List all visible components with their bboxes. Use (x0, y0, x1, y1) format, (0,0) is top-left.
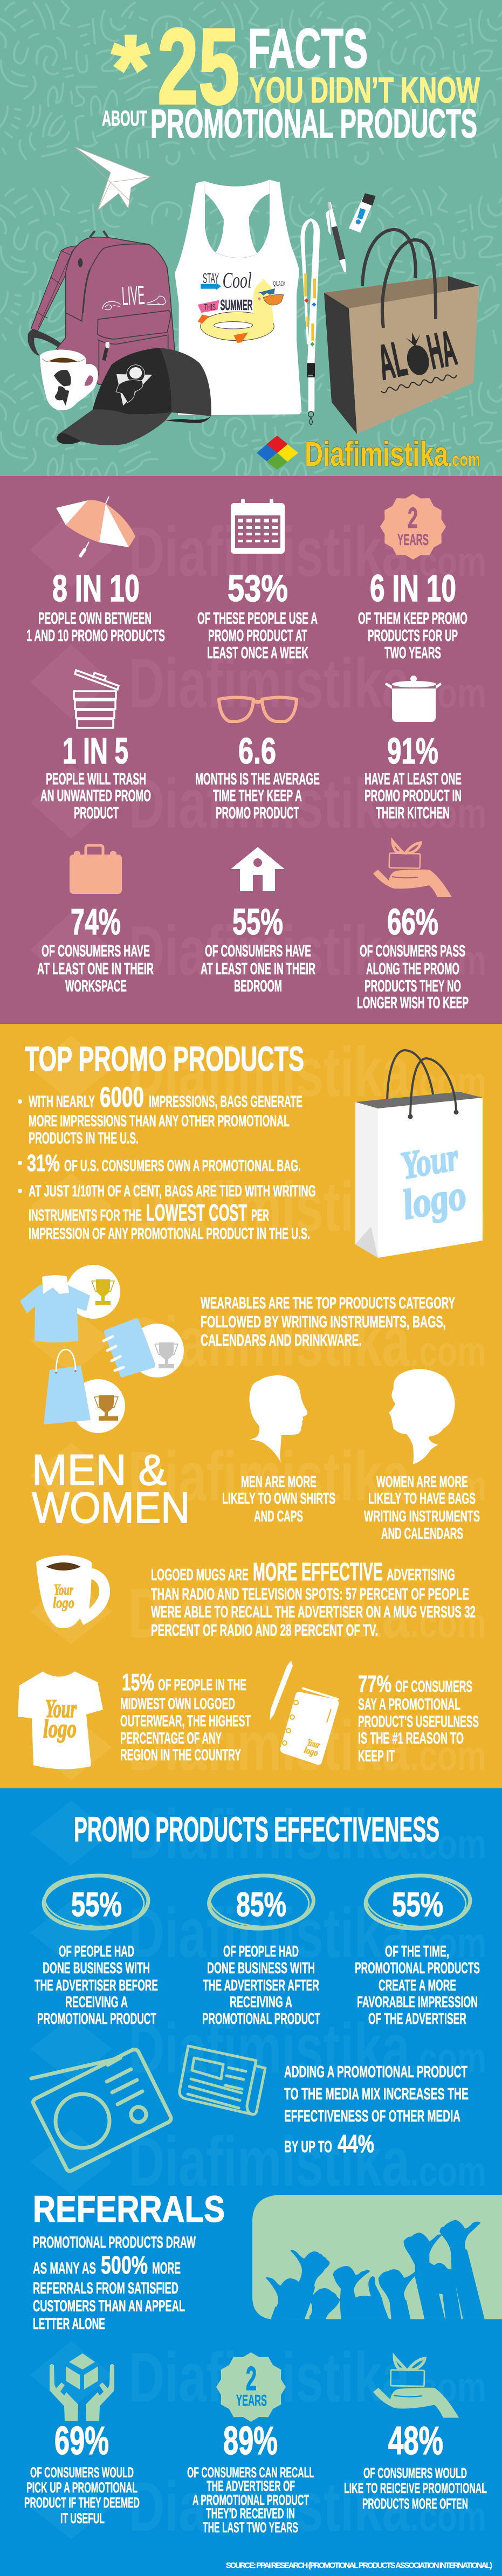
illustration: lanyard (300, 218, 320, 425)
icon: paper airplane (74, 147, 150, 210)
text: referrals copy: MORE (152, 2260, 181, 2277)
stat: 53%: LEAST ONCE A WEEK (207, 643, 308, 662)
stat: 55% before: 55% (71, 1886, 122, 1924)
icon: hands holding box (50, 2353, 114, 2421)
stat: 6 in 10: TWO YEARS (384, 643, 441, 662)
heading: men and women: MEN & (32, 1446, 167, 1494)
text: referrals copy: AS MANY AS (33, 2260, 96, 2277)
icon: 2 years badge: YEARS (397, 531, 429, 549)
title: 25 facts you didn't know about promotional products: 25 (157, 6, 239, 127)
text: wearables: CALENDARS AND DRINKWARE. (201, 1331, 362, 1349)
text: media mix: BY UP TO (284, 2137, 332, 2156)
stat: 85% after (202, 1872, 320, 2028)
icon: pen and notebook (270, 1661, 339, 1765)
bullet list: bag facts: 6000 (100, 1082, 144, 1113)
stat: 69%: IT USEFUL (60, 2510, 105, 2526)
title: 25 facts you didn't know about promotional products: * (112, 15, 150, 122)
stat: 85% after: OF PEOPLE HAD (223, 1943, 299, 1960)
logo: Diafimistika.com: Diafimistika (305, 435, 448, 473)
text: 15% midwest: PERCENTAGE OF ANY (120, 1730, 222, 1747)
stat: 74%: WORKSPACE (65, 976, 127, 995)
stat: 48% (344, 2419, 487, 2512)
illustration: maroon backpack with LIVE print (28, 231, 175, 384)
stat: 1 in 5: AN UNWANTED PROMO (40, 786, 151, 805)
stat: 69%: PICK UP A PROMOTIONAL (26, 2479, 137, 2496)
illustration: white tank top with duck print (175, 180, 301, 415)
stat: 1 in 5 (40, 731, 151, 822)
panel: promo products effectiveness (0, 1788, 502, 2576)
icon: trash can (74, 670, 119, 728)
stat: 91% (365, 731, 462, 822)
stat: 91%: 91% (387, 731, 438, 772)
text: men are more likely: LIKELY TO OWN SHIRTS (222, 1490, 335, 1507)
stat: 8 in 10: PEOPLE OWN BETWEEN (38, 609, 152, 628)
stat: 55% before: THE ADVERTISER BEFORE (35, 1977, 158, 1994)
stat: 53% (197, 567, 318, 662)
title: 25 facts you didn't know about promotional products (102, 6, 480, 146)
icon: mug with logo: Your (54, 1582, 74, 1599)
illustration: black baseball cap with astronaut print (57, 348, 211, 445)
icon: t-shirt with logo (18, 1671, 103, 1769)
stat: 55% before: PROMOTIONAL PRODUCT (37, 2010, 156, 2028)
illustration: kraft Aloha shopping bag (324, 230, 479, 434)
stat: 66%: 66% (387, 901, 438, 942)
title: 25 facts you didn't know about promotional products: FACTS (248, 17, 368, 79)
icon: umbrella (56, 497, 135, 557)
text: logoed mugs: ADVERTISING (387, 1565, 455, 1584)
heading: top promo products: TOP PROMO PRODUCTS (25, 1039, 304, 1078)
stat: 85% after: RECEIVING A (230, 1994, 292, 2011)
text: men are more likely (222, 1473, 335, 1525)
icon: 2 years badge blue (216, 2352, 286, 2422)
stat: 6.6: MONTHS IS THE AVERAGE (195, 769, 320, 788)
icon: t-shirt with logo: logo (43, 1714, 77, 1743)
illustration: white tank top with duck print: Cool (223, 268, 252, 293)
text: 15% midwest: MIDWEST OWN LOGOED (120, 1695, 235, 1713)
illustration: white tank top with duck print: STAY (203, 270, 219, 286)
stat: 6.6: PROMO PRODUCT (216, 803, 299, 822)
text: women are more likely (364, 1473, 480, 1542)
bullet list: bag facts: 31% (27, 1150, 60, 1176)
stat: 6 in 10: 6 IN 10 (370, 567, 456, 609)
icon: 2 years badge blue: YEARS (236, 2392, 267, 2409)
illustration: white shopping bag with your logo: Your (398, 1135, 462, 1187)
stat: 55% of the time: CREATE A MORE (379, 1977, 456, 1994)
stat: 8 in 10 (26, 567, 165, 645)
text: 15% midwest (120, 1669, 251, 1764)
stat: 1 in 5: 1 IN 5 (63, 731, 128, 772)
stat: 55% (201, 901, 315, 995)
icon: radio (31, 2050, 171, 2171)
bullet list: bag facts: PRODUCTS IN THE U.S. (29, 1129, 139, 1147)
illustration: white tank top with duck print: QUACK (273, 280, 285, 287)
stat: 89%: THE ADVERTISER OF (207, 2478, 295, 2494)
text: logoed mugs: LOGOED MUGS ARE (151, 1565, 249, 1584)
icon: t-shirt with logo: Your (45, 1695, 77, 1723)
icon: cooking pot (385, 676, 442, 722)
illustration: maroon backpack with LIVE print: LIVE (121, 280, 146, 311)
stat: 85% after: 85% (236, 1886, 286, 1924)
illustration: thumbs up crowd panel (252, 2195, 502, 2319)
stat: 85% after: THE ADVERTISER AFTER (203, 1977, 319, 1994)
stat: 55% before: OF PEOPLE HAD (59, 1943, 134, 1960)
bullet list: bag facts: IMPRESSIONS, BAGS GENERATE (149, 1093, 302, 1111)
illustration: kraft Aloha shopping bag: AL (373, 331, 411, 390)
illustration: white mug with mermaid (40, 349, 98, 410)
illustration: white shopping bag with your logo (355, 1050, 483, 1258)
bullet list: bag facts (18, 1082, 316, 1243)
stat: 89%: A PROMOTIONAL PRODUCT (192, 2492, 309, 2508)
icon: briefcase (70, 845, 122, 894)
text: logoed mugs: MORE EFFECTIVE (253, 1558, 383, 1586)
stat: 74% (37, 901, 154, 995)
stat: 74%: OF CONSUMERS HAVE (42, 941, 150, 960)
stat: 91%: THEIR KITCHEN (376, 803, 450, 822)
illustration: white tank top with duck print: THIS (204, 303, 216, 312)
stat: 6.6 (195, 731, 320, 822)
stat: 6.6: 6.6 (238, 731, 276, 772)
stat: 6 in 10 (358, 567, 467, 662)
illustration: white shopping bag with your logo: logo (399, 1171, 470, 1228)
source line: SOURCE: PPAI RESEARCH (PROMOTIONAL PRODUCTS ASSOCIATION INTERNATIONAL) (226, 2561, 492, 2570)
bullet list: bag facts: AT JUST 1/10TH OF A CENT, BAGS ARE TIED WITH WRITING (29, 1182, 316, 1200)
stat: 89% (187, 2419, 314, 2536)
text: media mix: 44% (338, 2130, 374, 2158)
watermarks in blue panel (30, 1795, 486, 2546)
icon: pen and notebook: logo (303, 1745, 319, 1758)
bullet list: bag facts: LOWEST COST (146, 1200, 247, 1226)
bullet list: bag facts: IMPRESSION OF ANY PROMOTIONAL PRODUCT IN THE U.S. (29, 1225, 310, 1243)
stat: 55%: BEDROOM (234, 976, 282, 995)
heading: men and women (32, 1446, 190, 1532)
illustration: kraft Aloha shopping bag: HA (423, 320, 460, 380)
watermarks in yellow panel (30, 1032, 486, 1785)
text: referrals copy (33, 2234, 196, 2333)
stat: 89%: THEY'D RECEIVED IN (206, 2505, 295, 2522)
text: wearables (201, 1293, 455, 1349)
stat: 69% (24, 2419, 140, 2526)
title: 25 facts you didn't know about promotional products: ABOUT (102, 107, 147, 130)
text: 15% midwest: OF PEOPLE IN THE (158, 1676, 246, 1694)
stat: 55%: AT LEAST ONE IN THEIR (201, 959, 315, 978)
stat: 8 in 10: 8 IN 10 (52, 567, 140, 609)
text: 77% usefulness (358, 1671, 479, 1765)
heading: men and women: WOMEN (32, 1484, 190, 1532)
bullet list: bag facts: MORE IMPRESSIONS THAN ANY OTHER PROMOTIONAL (29, 1112, 290, 1130)
bullet list: bag facts: INSTRUMENTS FOR THE (29, 1207, 142, 1224)
logo: Diafimistika.com: .com (448, 450, 480, 470)
stat: 55% of the time: OF THE TIME, (385, 1943, 449, 1960)
text: media mix (284, 2062, 469, 2158)
stat: 85% after: PROMOTIONAL PRODUCT (202, 2010, 320, 2028)
stat: 69%: 69% (54, 2419, 109, 2463)
text: men are more likely: MEN ARE MORE (241, 1473, 317, 1491)
bullet list: bag facts: PER (251, 1207, 269, 1224)
stat: 89%: 89% (223, 2419, 278, 2463)
icon: bag with bronze trophy (44, 1349, 125, 1433)
text: referrals copy: CUSTOMERS THAN AN APPEAL (33, 2297, 185, 2315)
text: 15% midwest: OUTERWEAR, THE HIGHEST (120, 1712, 251, 1730)
illustration: lighter (349, 193, 376, 233)
stat: 53%: OF THESE PEOPLE USE A (197, 609, 318, 628)
icon: polo shirt with gold trophy (20, 1265, 120, 1342)
illustration: pen (326, 202, 346, 272)
icon: 2 years badge blue: 2 (246, 2360, 257, 2398)
stat: 55%: OF CONSUMERS HAVE (205, 941, 311, 960)
icon: calendar (231, 499, 285, 554)
icon: hand holding gift blue (373, 2357, 459, 2417)
text: referrals copy: REFERRALS FROM SATISFIED (33, 2279, 178, 2297)
text: 15% midwest: 15% (122, 1669, 154, 1696)
stat: 69%: OF CONSUMERS WOULD (30, 2464, 134, 2481)
stat: 55% before: DONE BUSINESS WITH (43, 1960, 150, 1977)
icon: 2 years badge: 2 (408, 502, 418, 534)
icon: glasses (219, 698, 297, 721)
bullet list: bag facts: WITH NEARLY (29, 1093, 95, 1111)
text: referrals copy: PROMOTIONAL PRODUCTS DRAW (33, 2234, 196, 2251)
stat: 1 in 5: PEOPLE WILL TRASH (46, 769, 146, 788)
text: referrals copy: 500% (101, 2251, 148, 2279)
stat: 55% of the time (355, 1872, 480, 2028)
stat: 53%: 53% (228, 567, 288, 609)
panel: quick facts (0, 476, 502, 1024)
stat: 55% before (35, 1872, 158, 2028)
stat: 74%: 74% (71, 901, 121, 942)
stat: 1 in 5: PRODUCT (74, 803, 119, 822)
icon: house (231, 847, 285, 891)
text: 77% usefulness: KEEP IT (358, 1747, 395, 1765)
icon: 2 years badge (380, 494, 446, 560)
stat: 8 in 10: 1 AND 10 PROMO PRODUCTS (26, 626, 165, 645)
stat: 48%: 48% (388, 2419, 443, 2463)
stat: 74%: AT LEAST ONE IN THEIR (37, 959, 154, 978)
text: men are more likely: AND CAPS (254, 1508, 303, 1525)
illustration: white tank top with duck print: SUMMER (220, 297, 252, 313)
stat: 66% (357, 901, 469, 1012)
icon: mug with logo (36, 1555, 105, 1628)
text: logoed mugs (151, 1558, 476, 1640)
bullet list: bag facts: OF U.S. CONSUMERS OWN A PROMOTIONAL BAG. (64, 1157, 301, 1175)
text: referrals copy: LETTER ALONE (33, 2315, 105, 2333)
icon: hand holding gift (373, 841, 452, 897)
stat: 89%: OF CONSUMERS CAN RECALL (187, 2464, 314, 2481)
icon: notebook with silver trophy (104, 1319, 184, 1377)
icon: newspaper (180, 2046, 265, 2114)
panel: hero header with products (0, 0, 502, 476)
icon: woman silhouette (389, 1369, 455, 1464)
stat: 6.6: TIME THEY KEEP A (213, 786, 302, 805)
panel: top promo products (0, 1024, 502, 1788)
heading: referrals: REFERRALS (33, 2188, 225, 2230)
stat: 69%: PRODUCT IF THEY DEEMED (24, 2495, 140, 2511)
text: 15% midwest: REGION IN THE COUNTRY (120, 1746, 241, 1764)
icon: man silhouette (249, 1375, 307, 1463)
watermarks in facts panel (30, 512, 486, 990)
stat: 55% of the time: 55% (392, 1886, 443, 1924)
icon: mug with logo: logo (53, 1595, 74, 1611)
icon: pen and notebook: Your (306, 1737, 321, 1751)
text: 77% usefulness: 77% (358, 1671, 391, 1697)
stat: 89%: THE LAST TWO YEARS (203, 2519, 298, 2536)
stat: 85% after: DONE BUSINESS WITH (207, 1960, 315, 1977)
stat: 55%: 55% (232, 901, 283, 942)
stat: 55% before: RECEIVING A (65, 1994, 128, 2011)
stat: 53%: PROMO PRODUCT AT (208, 626, 307, 645)
